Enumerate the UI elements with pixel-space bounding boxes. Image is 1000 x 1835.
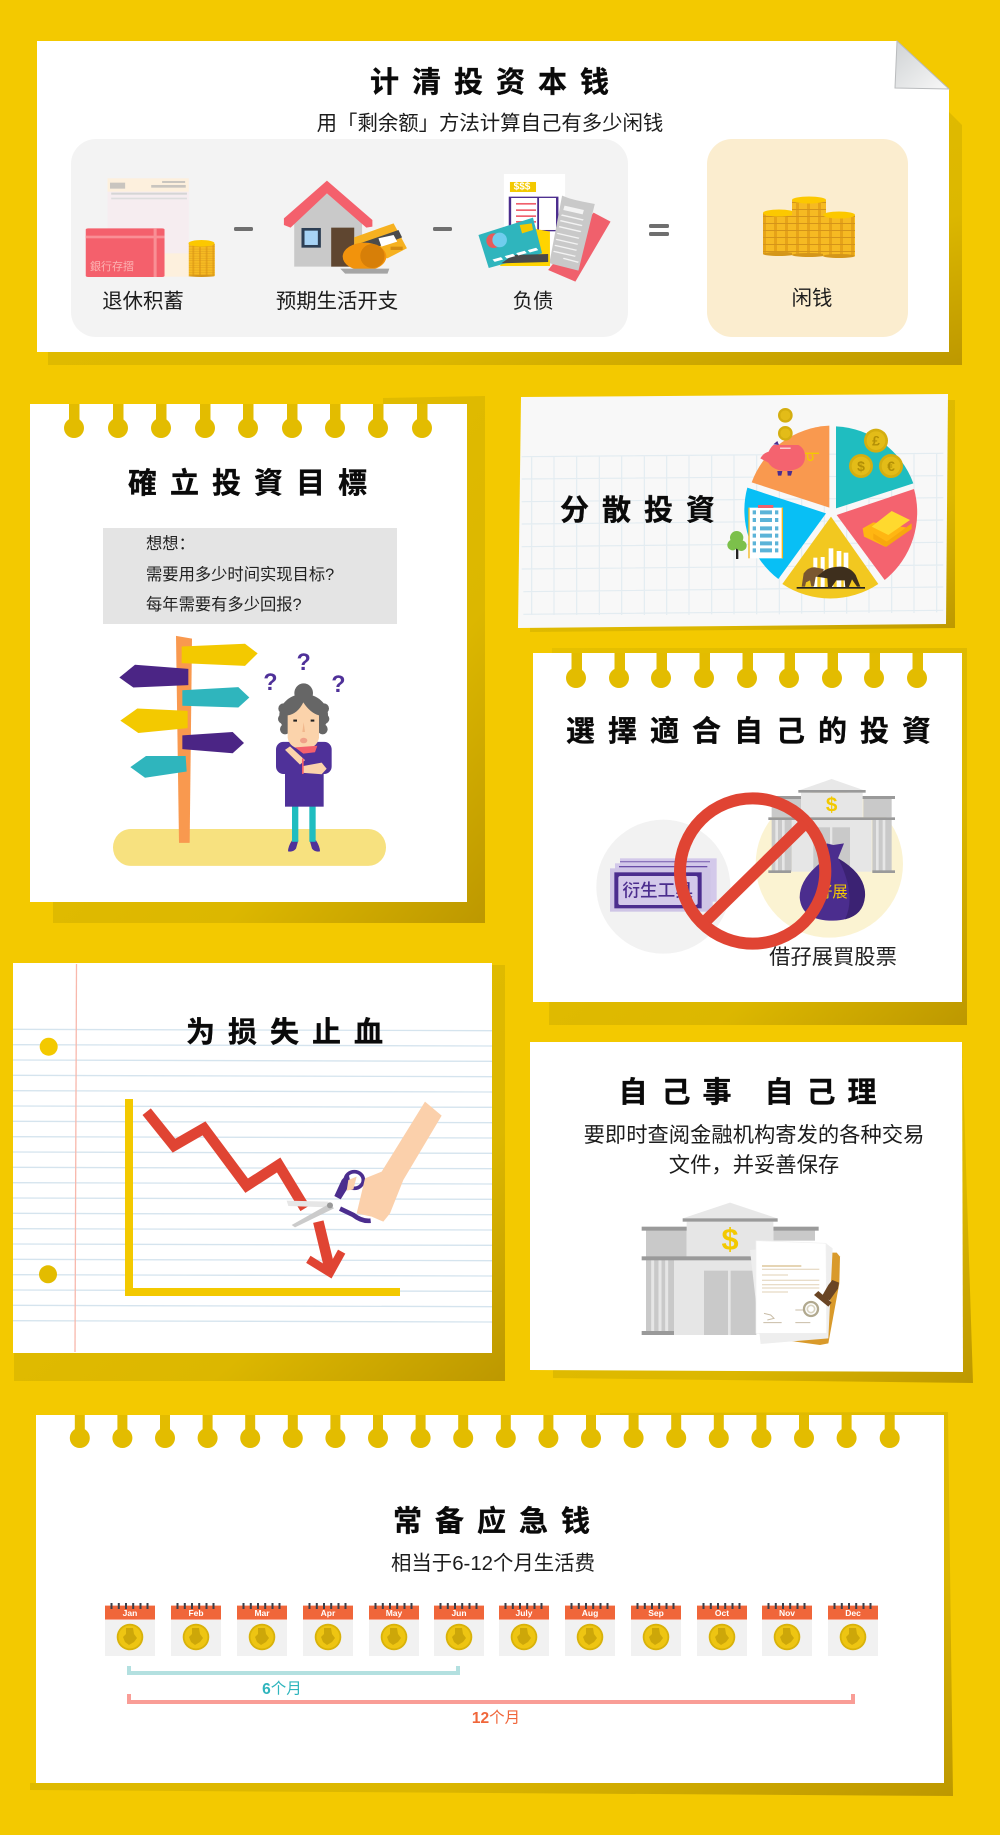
calendar: July (499, 1603, 549, 1656)
subheading: 用「剩余额」方法计算自己有多少闲钱 (317, 112, 663, 135)
panel: set investment goal (30, 396, 485, 923)
calendar: Feb (171, 1603, 221, 1656)
icon: coin stacks (763, 196, 855, 258)
pie chart with asset icons: € (887, 458, 895, 474)
pie chart with asset icons: $ (857, 458, 865, 474)
heading: 選擇適合自己的投資 (566, 714, 944, 748)
heading: 为损失止血 (186, 1016, 396, 1049)
panel shadow (14, 965, 505, 1381)
calendar: Dec: Dec (845, 1608, 861, 1618)
panel: stop losses (13, 963, 505, 1381)
calendar: Oct: Oct (715, 1608, 729, 1618)
calendar: Apr (303, 1603, 353, 1656)
pie chart with asset icons: £ (872, 433, 880, 449)
panel: choose suitable investment (533, 648, 967, 1025)
caption: 借孖展買股票 (769, 945, 897, 969)
icon: bank book (86, 178, 215, 277)
icon: bank book: 銀行存摺 (90, 259, 134, 273)
calendar: Oct (697, 1603, 747, 1656)
panel shadow (530, 400, 955, 632)
calendar: Jun: Jun (451, 1608, 467, 1618)
calendar: Aug (565, 1603, 615, 1656)
label: 12 months: 12个月 (472, 1708, 520, 1726)
calendar: Jun (434, 1603, 484, 1656)
heading: 计清投资本钱 (370, 66, 622, 99)
calendar: July: July (515, 1608, 533, 1618)
panel shadow (553, 1042, 973, 1383)
illustration: prohibited derivatives and margin: $ (826, 793, 838, 816)
calendar: Sep: Sep (648, 1608, 664, 1618)
illustration: prohibited derivatives and margin: 孖展 (817, 884, 848, 901)
panel: calculate investment capital (37, 41, 962, 365)
icon: bills and credit cards: $$$ (514, 182, 531, 192)
panel shadow (48, 112, 962, 365)
illustration: bank and signed documents: $ (721, 1222, 739, 1256)
calendar row (105, 1603, 878, 1656)
illustration: signpost and confused woman: ? (331, 672, 345, 698)
body text: 要即时查阅金融机构寄发的各种交易 (584, 1123, 924, 1147)
questions box: 每年需要有多少回报? (146, 596, 302, 614)
heading: 確立投資目標 (128, 467, 380, 500)
folded corner (895, 41, 949, 89)
minus sign (433, 227, 452, 231)
panel shadow (549, 648, 967, 1025)
margin line (75, 964, 76, 1352)
paper sheet (36, 1415, 944, 1783)
lined paper sheet (13, 963, 492, 1353)
subheading: 相当于6-12个月生活费 (391, 1552, 595, 1575)
illustration: signpost and confused woman: ? (263, 669, 277, 696)
label: liabilities: 负债 (513, 290, 553, 313)
calendar: Sep (631, 1603, 681, 1656)
calendar: May (369, 1603, 419, 1656)
bracket: 6 months (129, 1666, 458, 1673)
panel shadow (53, 396, 485, 923)
body text: 文件，并妥善保存 (669, 1153, 839, 1177)
illustration: signpost and confused woman (113, 636, 386, 866)
panel shadow (30, 1412, 953, 1796)
chart: falling line being cut (125, 1099, 442, 1296)
paper sheet (530, 1042, 963, 1372)
heading: 常备应急钱 (393, 1505, 603, 1538)
calendar: Apr: Apr (321, 1608, 336, 1618)
ruled lines (13, 1029, 492, 1322)
illustration: prohibited derivatives and margin: 衍生工具 (622, 881, 693, 901)
calendar: Mar (237, 1603, 287, 1656)
body text (584, 1123, 924, 1177)
bracket: 12 months (129, 1694, 853, 1702)
panel: diversify investment (518, 394, 955, 632)
questions box (103, 528, 397, 624)
calendar: Nov (762, 1603, 812, 1656)
heading: 分散投資 (560, 494, 728, 527)
paper sheet (37, 41, 949, 352)
binding holes (70, 1415, 900, 1448)
calendar: Jan (105, 1603, 155, 1656)
calendar: Mar: Mar (254, 1608, 270, 1618)
calendar: Jan: Jan (123, 1608, 137, 1618)
label: retirement savings: 退休积蓄 (102, 290, 184, 313)
binding holes (64, 404, 432, 438)
equals sign (649, 224, 669, 236)
minus sign (234, 227, 253, 231)
grid (522, 453, 943, 615)
questions box: 需要用多少时间实现目标? (146, 566, 334, 584)
paper sheet (533, 653, 962, 1002)
graph paper sheet (518, 394, 948, 628)
illustration: bank and signed documents (642, 1203, 840, 1345)
calendar: May: May (386, 1608, 403, 1618)
panel: manage your own affairs (530, 1042, 973, 1383)
calendar: Aug: Aug (582, 1608, 598, 1618)
result panel (707, 139, 908, 337)
heading: 自己事 自己理 (618, 1076, 877, 1109)
questions box: 想想： (146, 535, 195, 553)
pie chart with asset icons (727, 408, 917, 599)
paper sheet (30, 404, 467, 902)
binding holes (566, 653, 927, 688)
calendar: Nov: Nov (779, 1608, 795, 1618)
label: 6 months: 6个月 (262, 1680, 302, 1698)
icon: bills and credit cards (478, 174, 611, 282)
illustration: signpost and confused woman: ? (297, 650, 311, 676)
binder holes (39, 1038, 58, 1283)
illustration: prohibited derivatives and margin (596, 779, 903, 954)
formula group panel (71, 139, 628, 337)
label: expected living expenses: 预期生活开支 (276, 290, 398, 313)
icon: house and living expenses (284, 181, 407, 274)
label: spare money: 闲钱 (792, 287, 832, 310)
panel: emergency money (30, 1412, 953, 1796)
calendar: Feb: Feb (188, 1608, 204, 1618)
calendar: Dec (828, 1603, 878, 1656)
